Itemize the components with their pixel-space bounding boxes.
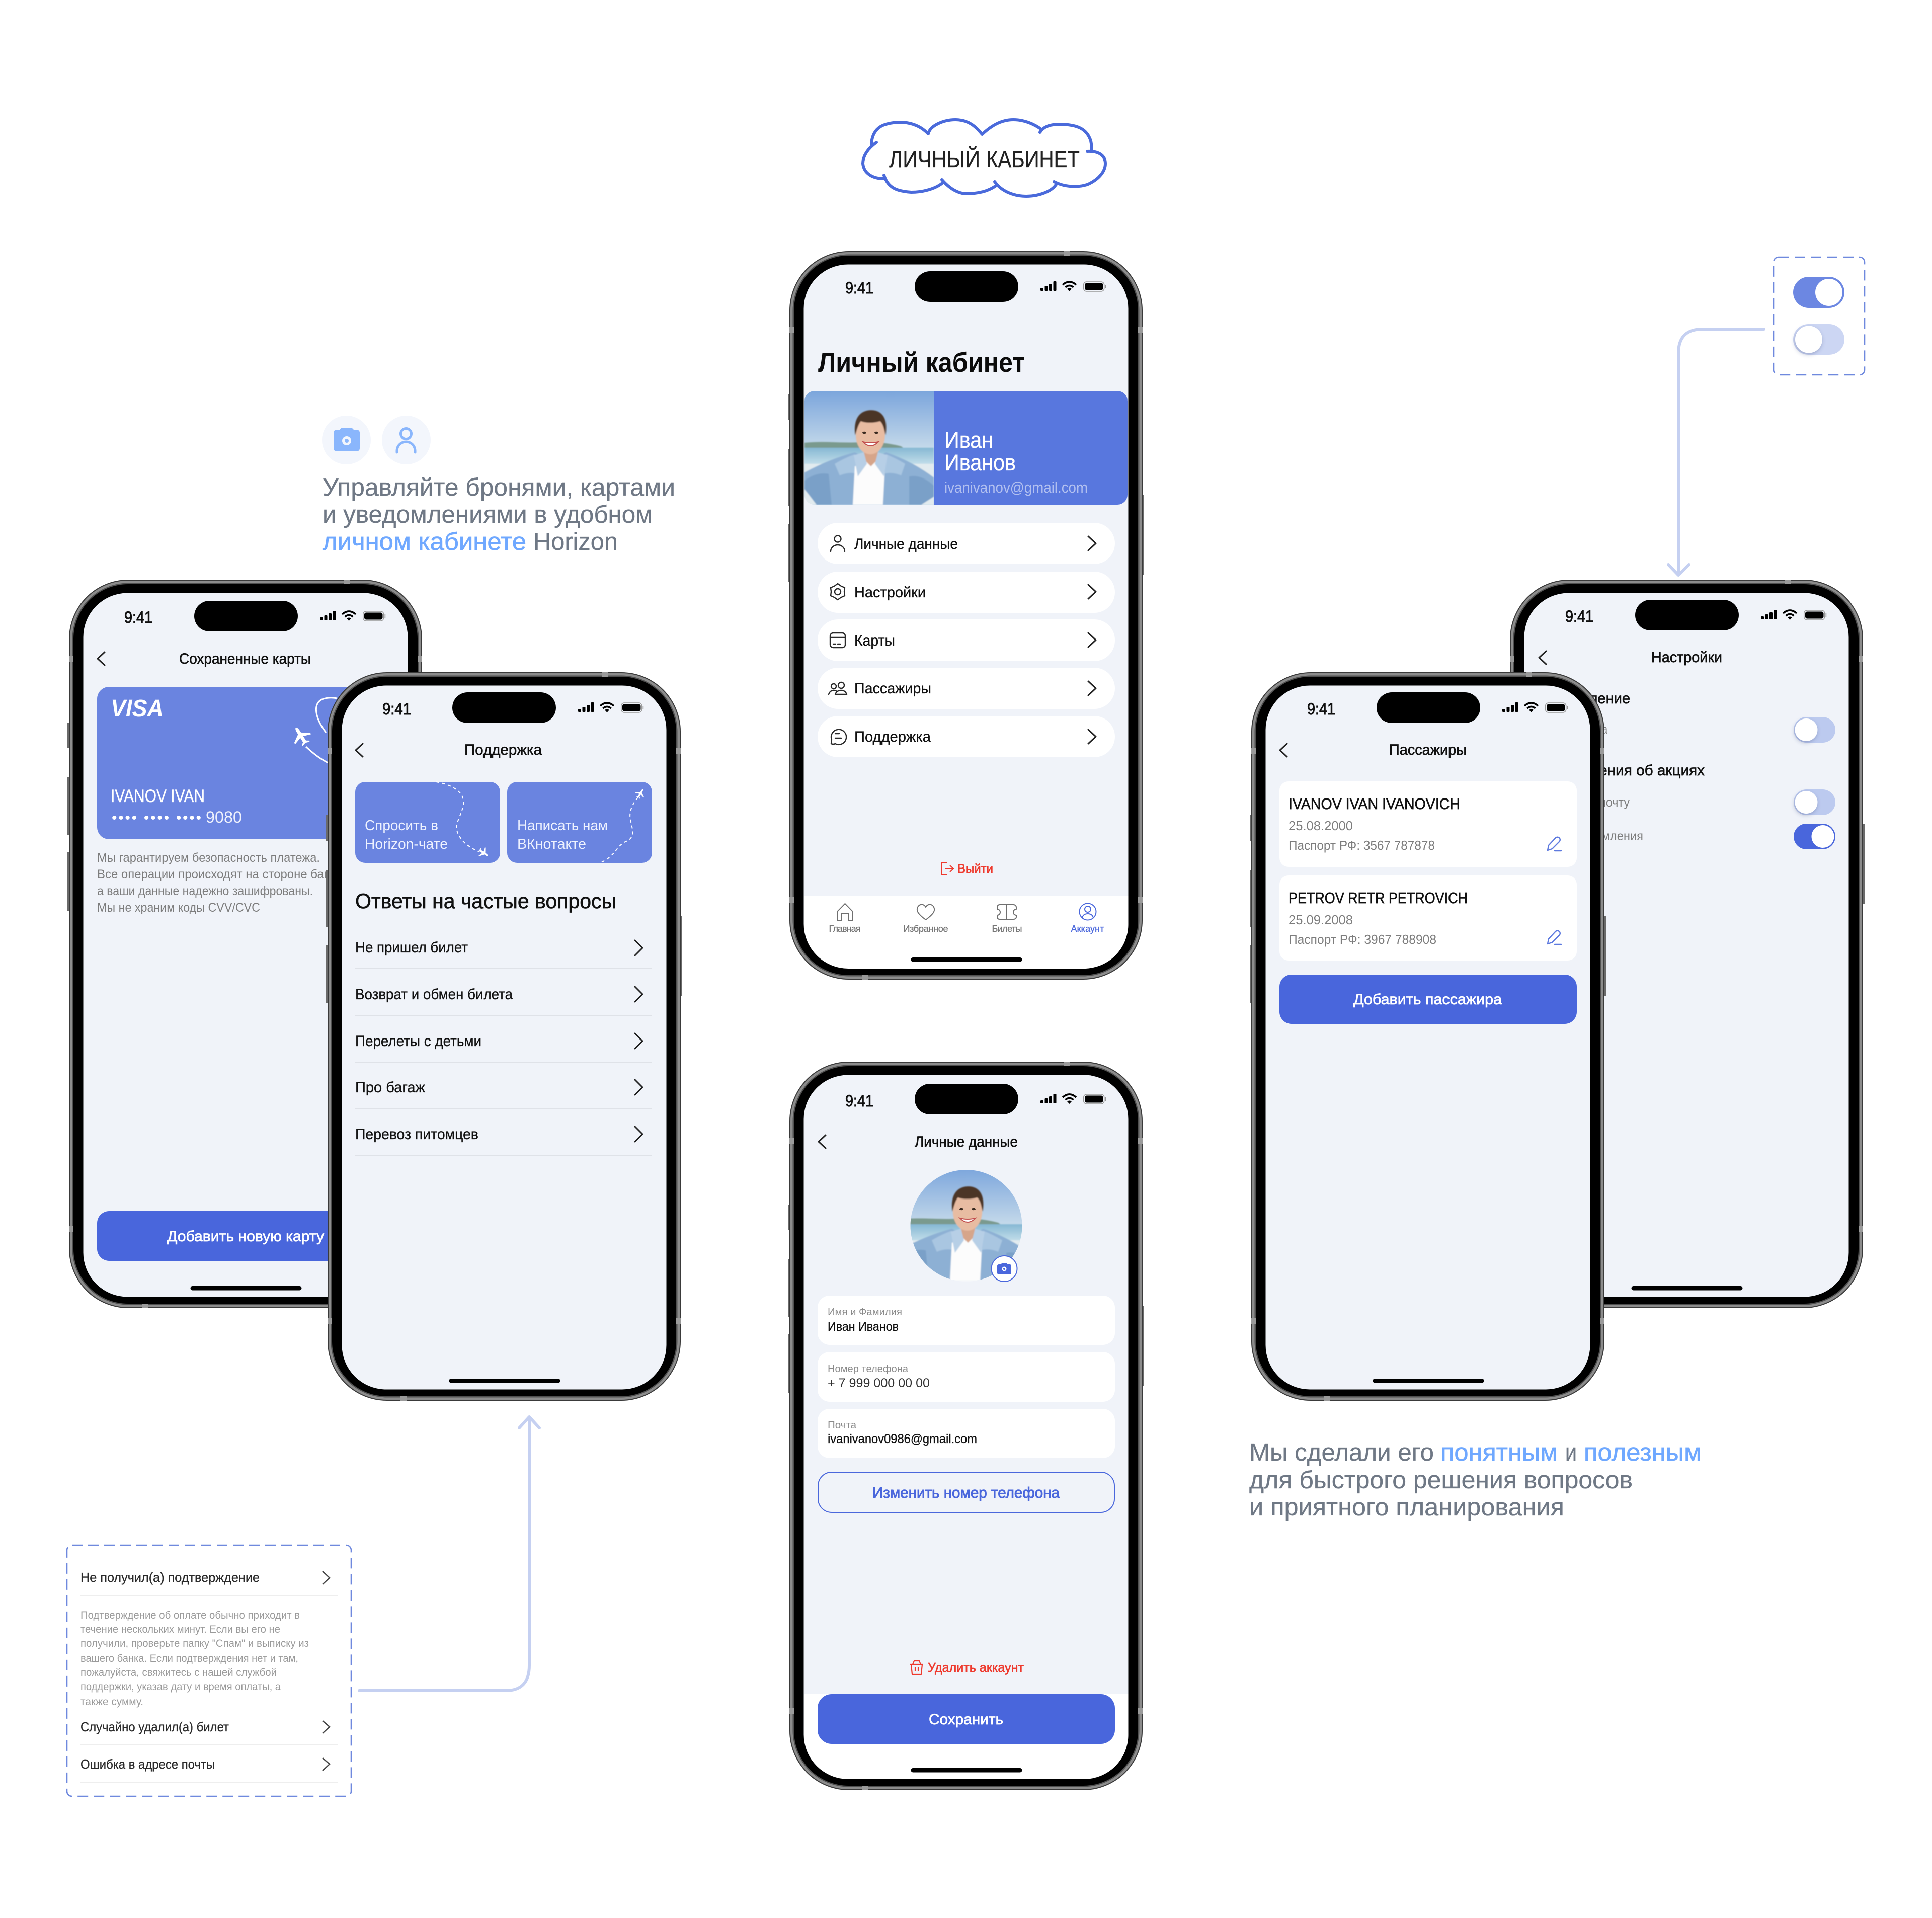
phone: personal data bbox=[788, 1062, 1144, 1790]
phone: saved cards bbox=[67, 580, 424, 1308]
title text: КАБИНЕТ bbox=[986, 146, 1080, 172]
settings list: Уведомления об акциях bbox=[1539, 762, 1705, 779]
bank card: •••• •••• •••• bbox=[112, 810, 201, 826]
profile card: Иван bbox=[944, 427, 993, 453]
phone: passengers: 9:41 bbox=[1307, 700, 1335, 718]
answer text bbox=[80, 1610, 309, 1708]
settings list: Письма на почту bbox=[1539, 795, 1630, 810]
cloud outline bbox=[863, 120, 1105, 196]
phone: support: 9:41 bbox=[382, 700, 411, 718]
field: name bbox=[818, 1296, 1115, 1345]
field: phone: + 7 999 000 00 00 bbox=[828, 1376, 930, 1390]
menu: cards: Карты bbox=[854, 632, 895, 649]
right text block: для быстрого решения вопросов bbox=[1249, 1467, 1633, 1494]
bank card: IVANOV IVAN bbox=[111, 786, 205, 806]
field: name: Имя и Фамилия bbox=[828, 1307, 902, 1318]
save area bbox=[804, 1694, 1128, 1779]
answer text: течение нескольких минут. Если вы его не bbox=[80, 1624, 280, 1635]
security note: Мы гарантируем безопасность платежа. bbox=[97, 851, 320, 865]
left intro block bbox=[322, 416, 675, 555]
page heading: Личный кабинет bbox=[818, 347, 1025, 378]
intro text bbox=[323, 474, 675, 555]
tab bar: Аккаунт bbox=[1071, 924, 1104, 934]
profile card bbox=[934, 391, 1128, 505]
phone: passengers: Пассажиры bbox=[1389, 742, 1467, 758]
right text block: Мы сделали его bbox=[1249, 1439, 1434, 1466]
intro text: личном кабинете bbox=[323, 528, 526, 555]
field: email bbox=[818, 1409, 1115, 1458]
tab bar: Главная bbox=[829, 924, 860, 934]
callout: faq expanded: Не получил(а) подтверждение bbox=[80, 1570, 260, 1585]
faq list: Перевоз питомцев bbox=[355, 1126, 478, 1143]
menu: settings: Настройки bbox=[854, 584, 926, 601]
profile card: ivanivanov@gmail.com bbox=[944, 478, 1088, 496]
passenger card 2: Паспорт РФ: 3967 788908 bbox=[1289, 932, 1436, 947]
settings list: Уведомление bbox=[1539, 690, 1630, 707]
phone: passengers bbox=[1250, 672, 1606, 1401]
support card: chat: Horizon-чате bbox=[365, 836, 448, 852]
callout: faq expanded bbox=[67, 1545, 351, 1796]
profile photo bbox=[804, 391, 934, 505]
bank card bbox=[97, 687, 394, 839]
passenger card 1: Паспорт РФ: 3567 787878 bbox=[1289, 838, 1435, 853]
add passenger button bbox=[1279, 975, 1577, 1024]
answer text: поддержки, указав дату и время оплаты, а bbox=[80, 1681, 281, 1693]
intro text: Horizon bbox=[533, 528, 618, 555]
logout bbox=[941, 862, 993, 876]
support card: chat bbox=[355, 782, 500, 863]
passenger card 1: 25.08.2000 bbox=[1289, 818, 1353, 833]
menu: personal data: Личные данные bbox=[854, 536, 958, 552]
callout: faq expanded: Ошибка в адресе почты bbox=[80, 1756, 215, 1772]
menu: personal data bbox=[818, 523, 1115, 564]
faq list: Про багаж bbox=[355, 1079, 425, 1096]
phone: support: Поддержка bbox=[464, 742, 542, 758]
right text block: полезным bbox=[1584, 1439, 1702, 1466]
faq heading: Ответы на частые вопросы bbox=[355, 889, 616, 913]
passenger card 2 bbox=[1279, 875, 1577, 961]
change phone button bbox=[818, 1472, 1114, 1512]
bank card: VISA bbox=[111, 695, 164, 722]
support card: vk: Написать нам bbox=[517, 818, 608, 834]
field: phone bbox=[818, 1352, 1115, 1402]
intro text: и уведомлениями в удобном bbox=[323, 501, 653, 528]
answer text: получили, проверьте папку "Спам" и выписку из bbox=[80, 1638, 309, 1649]
phone: settings: 9:41 bbox=[1565, 607, 1593, 625]
profile card: Иванов bbox=[944, 450, 1016, 475]
add card button bbox=[97, 1211, 394, 1261]
phone: personal data: Личные данные bbox=[915, 1134, 1018, 1150]
settings list bbox=[1539, 690, 1835, 849]
intro text: Управляйте бронями, картами bbox=[323, 474, 675, 501]
phone: settings: Настройки bbox=[1651, 649, 1722, 666]
field: phone: Номер телефона bbox=[828, 1364, 909, 1375]
tab bar bbox=[804, 896, 1128, 969]
callout: faq expanded: Случайно удалил(а) билет bbox=[80, 1719, 229, 1734]
security note: Все операции происходят на стороне банка, bbox=[97, 867, 346, 882]
field: email: ivanivanov0986@gmail.com bbox=[828, 1432, 977, 1446]
icon: camera bbox=[322, 416, 371, 464]
faq list: Перелеты с детьми bbox=[355, 1033, 481, 1050]
menu: support: Поддержка bbox=[854, 729, 931, 745]
menu: settings bbox=[818, 572, 1115, 613]
security note: Мы не храним коды CVV/CVC bbox=[97, 901, 260, 915]
title text: ЛИЧНЫЙ bbox=[889, 146, 980, 172]
support card: chat: Спросить в bbox=[365, 818, 438, 834]
tab bar: Избранное bbox=[904, 924, 948, 934]
field: name: Иван Иванов bbox=[828, 1320, 899, 1334]
menu: support bbox=[818, 716, 1115, 757]
title: cloud heading bbox=[863, 120, 1105, 196]
right text block: и bbox=[1565, 1439, 1577, 1466]
phone: saved cards: 9:41 bbox=[124, 608, 152, 626]
passenger card 1 bbox=[1279, 781, 1577, 867]
menu: passengers: Пассажиры bbox=[854, 680, 931, 697]
passenger card 1: IVANOV IVAN IVANOVICH bbox=[1289, 795, 1460, 813]
delete account: Удалить аккаунт bbox=[928, 1660, 1024, 1675]
right text block bbox=[1249, 1439, 1702, 1521]
callout: toggles bbox=[1774, 257, 1865, 375]
settings list: Push-уведомления bbox=[1539, 829, 1643, 843]
phone: personal data: 9:41 bbox=[845, 1092, 873, 1110]
support card: vk: ВКнотакте bbox=[517, 836, 586, 852]
settings list: Email-рассылка bbox=[1539, 723, 1607, 737]
menu: cards bbox=[818, 619, 1115, 661]
phone: support bbox=[326, 672, 682, 1401]
avatar bbox=[911, 1170, 1022, 1282]
answer text: также сумму. bbox=[80, 1696, 143, 1708]
faq list: Не пришел билет bbox=[355, 939, 468, 956]
phone: account main: 9:41 bbox=[845, 279, 873, 297]
tab bar: Билеты bbox=[992, 924, 1022, 934]
right text block: и приятного планирования bbox=[1249, 1494, 1564, 1521]
right text block: понятным bbox=[1440, 1439, 1558, 1466]
answer text: пожалуйста, свяжитесь с нашей службой bbox=[80, 1667, 277, 1679]
arrow: toggles to settings phone bbox=[1668, 329, 1764, 575]
faq list: Возврат и обмен билета bbox=[355, 986, 513, 1003]
icon: user bbox=[382, 416, 431, 464]
toggle off bbox=[1793, 324, 1844, 355]
add card button: Добавить новую карту bbox=[167, 1228, 324, 1245]
arrow: faq box to support phone bbox=[359, 1417, 539, 1691]
logout: Выйти bbox=[957, 862, 993, 876]
save area: Сохранить bbox=[929, 1711, 1003, 1728]
menu: passengers bbox=[818, 668, 1115, 709]
phone: account main bbox=[788, 251, 1144, 980]
add passenger button: Добавить пассажира bbox=[1353, 991, 1502, 1008]
field: email: Почта bbox=[828, 1420, 857, 1431]
answer text: Подтверждение об оплате обычно приходит в bbox=[80, 1610, 300, 1621]
phone: saved cards: Сохраненные карты bbox=[179, 651, 311, 667]
answer text: вашего банка. Если подтверждения нет и там, bbox=[80, 1653, 298, 1664]
passenger card 2: PETROV RETR PETROVICH bbox=[1289, 889, 1468, 907]
passenger card 2: 25.09.2008 bbox=[1289, 912, 1353, 927]
security note bbox=[97, 851, 346, 915]
faq list bbox=[355, 939, 652, 1156]
toggle on bbox=[1793, 277, 1844, 308]
phone: settings bbox=[1508, 580, 1865, 1308]
bank card: 9080 bbox=[206, 808, 242, 826]
security note: а ваши данные надежно зашифрованы. bbox=[97, 884, 313, 898]
change phone button: Изменить номер телефона bbox=[872, 1484, 1060, 1501]
support card: vk bbox=[507, 782, 652, 863]
